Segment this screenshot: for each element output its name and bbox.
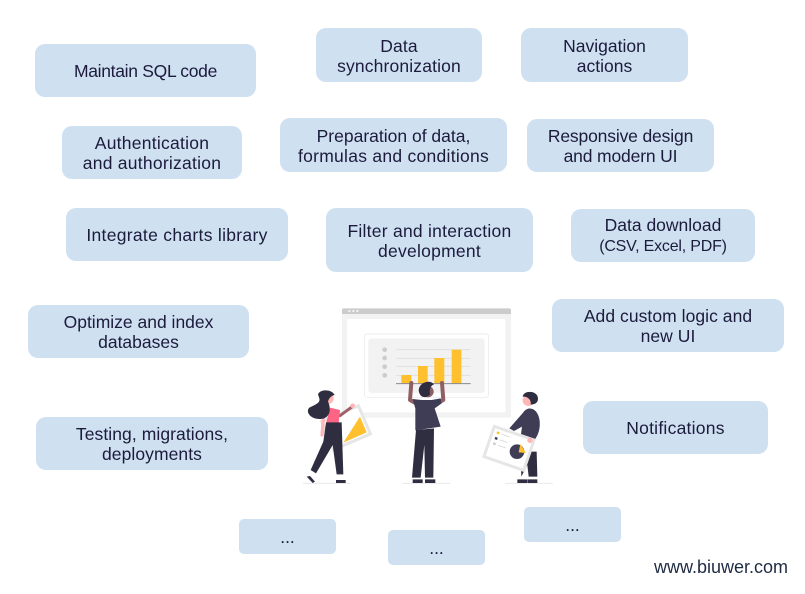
- box: Notifications: [583, 401, 768, 454]
- box: Maintain SQL code: [35, 44, 256, 97]
- box: Navigation actions: actions: [577, 56, 632, 76]
- box: Testing, migrations, deployments: Testing, migrations,: [76, 424, 228, 444]
- box: Integrate charts library: [66, 208, 288, 261]
- box: Data download: Data download: [605, 215, 721, 235]
- box: Optimize and index databases: [28, 305, 249, 358]
- box: Responsive design and modern UI: [527, 119, 714, 172]
- box: Optimize and index databases: Optimize and index: [64, 312, 213, 332]
- box: Testing, migrations, deployments: [36, 417, 268, 470]
- box: Responsive design and modern UI: Responsive design: [548, 126, 693, 146]
- box: Filter and interaction development: development: [378, 240, 481, 260]
- box: Notifications: Notifications: [626, 418, 725, 438]
- box: Data download: [571, 209, 755, 262]
- bar chart: [382, 347, 471, 384]
- person: woman with chart card: [307, 390, 370, 483]
- box: Optimize and index databases: databases: [98, 332, 179, 352]
- box: ellipsis left: [239, 519, 336, 554]
- box: Data synchronization: [316, 28, 482, 82]
- ground lines: [303, 482, 553, 485]
- box: Maintain SQL code: Maintain SQL code: [74, 61, 217, 81]
- box: Testing, migrations, deployments: deployments: [102, 444, 202, 464]
- box: Add custom logic and new UI: [552, 299, 784, 352]
- box: ellipsis left: ...: [280, 527, 295, 547]
- browser window: [342, 308, 511, 418]
- person: man holding pie chart card: [484, 392, 540, 483]
- box: Add custom logic and new UI: Add custom logic and: [584, 306, 752, 326]
- box: Responsive design and modern UI: and modern UI: [564, 146, 677, 166]
- box: Filter and interaction development: Filter and interaction: [347, 220, 512, 240]
- box: ellipsis right: [524, 507, 621, 542]
- box: ellipsis right: ...: [565, 515, 580, 535]
- box: Preparation of data, formulas and conditions: Preparation of data,: [317, 126, 470, 146]
- box: Preparation of data, formulas and conditions: formulas and conditions: [298, 146, 489, 166]
- box: Authentication and authorization: and authorization: [83, 153, 221, 173]
- box: Preparation of data, formulas and conditions: [280, 118, 507, 172]
- box: Data synchronization: synchronization: [337, 56, 461, 76]
- box: Add custom logic and new UI: new UI: [641, 326, 695, 346]
- box: Navigation actions: Navigation: [563, 36, 646, 56]
- box: Data synchronization: Data: [380, 36, 418, 56]
- box: ellipsis middle: [388, 530, 485, 565]
- person: man raising arms: [410, 382, 443, 483]
- box: Filter and interaction development: [326, 208, 533, 272]
- box: Data download: (CSV, Excel, PDF): [599, 238, 727, 255]
- box: Integrate charts library: Integrate charts library: [86, 225, 268, 245]
- website url: www.biuwer.com: [654, 557, 788, 577]
- box: Authentication and authorization: Authentication: [95, 133, 209, 153]
- box: Authentication and authorization: [62, 126, 242, 179]
- box: Navigation actions: [521, 28, 688, 82]
- box: ellipsis middle: ...: [429, 538, 444, 558]
- illustration: team building a dashboard: [302, 308, 552, 484]
